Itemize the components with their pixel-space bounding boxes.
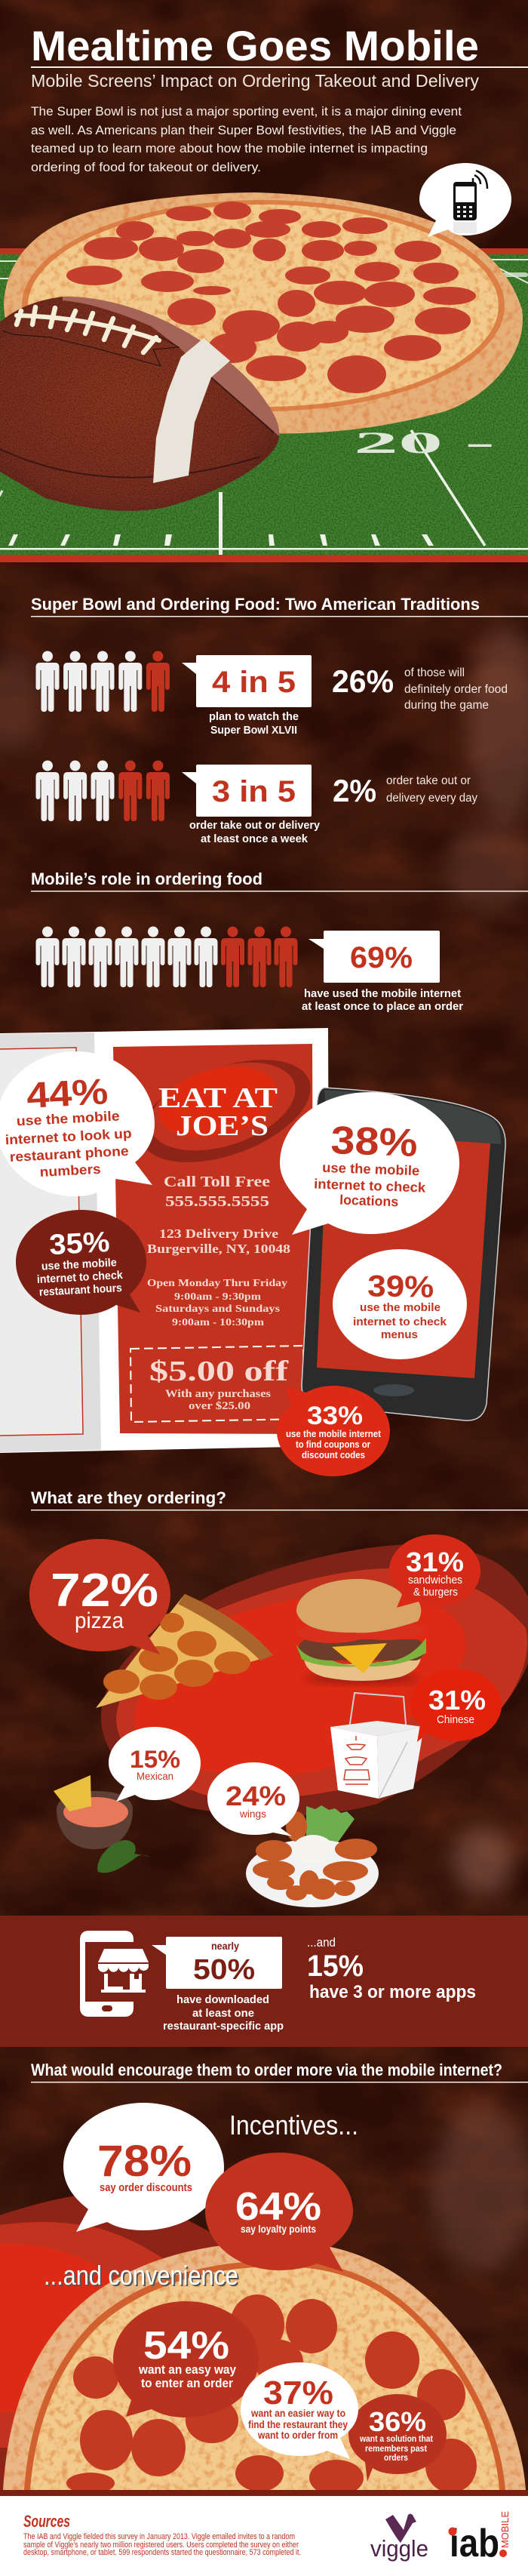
caption: downloaded: at least one	[192, 2007, 254, 2020]
title rule	[31, 66, 528, 68]
bubble: 38%	[280, 1092, 459, 1235]
bubble: 31% Chinese: Chinese	[437, 1713, 474, 1726]
stat: 2%: delivery every day	[386, 792, 477, 805]
bubble: 15% Mexican: 15%	[130, 1746, 180, 1773]
bubble: 33%: discount codes	[302, 1450, 365, 1460]
bubble: 39%: internet to check	[353, 1316, 447, 1328]
bubble: 39%: menus	[381, 1328, 418, 1341]
bubble: 44%: restaurant phone	[9, 1143, 129, 1165]
callout: 3 in 5	[182, 765, 312, 817]
bubble: 37% find restaurant: want to order from	[257, 2430, 338, 2441]
sources text	[23, 2532, 301, 2557]
callout: 3 in 5: 3 in 5	[212, 775, 296, 808]
intro paragraph: The Super Bowl is not just a major sporting event, it is a major dining event	[31, 105, 462, 118]
bubble: 54% easy way: 54%	[143, 2324, 229, 2368]
bubble: 33%: 33%	[307, 1402, 363, 1430]
bubble: 35%: 35%	[48, 1226, 110, 1261]
food: salsa and chip	[54, 1775, 151, 1873]
bubble: 36% remembers orders: orders	[384, 2452, 408, 2463]
people: 69%	[36, 927, 297, 987]
stat: 26%	[332, 663, 508, 712]
callout: 4 in 5: 4 in 5	[212, 666, 296, 699]
bubble: 39%: use the mobile	[360, 1301, 441, 1314]
icon: phone with storefront	[80, 1931, 149, 2017]
caption: order take out: order take out or delivery	[189, 819, 321, 832]
bubble: 78% discounts: 78%	[97, 2137, 192, 2186]
caption: plan to watch	[209, 710, 299, 737]
bubble: 44%: use the mobile	[16, 1108, 120, 1129]
bubble: 44%: numbers	[39, 1162, 101, 1180]
bubble: 37% find restaurant	[241, 2362, 358, 2459]
panel: restaurant apps band	[0, 1916, 528, 2047]
bubble: 31% sandwiches and burgers: 31%	[406, 1547, 464, 1577]
bubble: 44%	[0, 1051, 155, 1196]
intro paragraph: teamed up to learn more about how the mobile internet is impacting	[31, 142, 428, 155]
caption: have used: at least once to place an order	[302, 1000, 463, 1013]
bubble: 15% Mexican	[109, 1727, 201, 1802]
stat: 15% apps: ...and	[307, 1935, 336, 1950]
caption: downloaded: restaurant-specific app	[163, 2020, 284, 2033]
subtitle: Mobile Screens’ Impact on Ordering Takeout and Delivery	[31, 71, 480, 91]
smartphone	[302, 1088, 505, 1420]
bubble: 38%: 38%	[330, 1119, 419, 1165]
bubble: 35%: use the mobile	[41, 1256, 117, 1273]
flyer details: 123 Delivery Drive	[159, 1226, 279, 1241]
flyer details	[147, 1174, 290, 1328]
title: Mealtime Goes Mobile	[31, 22, 479, 69]
flyer details: 9:00am - 10:30pm	[172, 1317, 264, 1328]
logo: viggle	[370, 2514, 428, 2562]
caption: order take out	[189, 819, 321, 845]
red swirl: lower backdrop	[0, 2194, 249, 2490]
coupon	[130, 1346, 305, 1422]
bubble: 54% easy way: to enter an order	[141, 2376, 233, 2390]
bubble: 33%: to find coupons or	[296, 1439, 370, 1450]
bubble: 35%: restaurant hours	[38, 1282, 122, 1299]
footer divider band	[0, 2490, 528, 2496]
hero: football field: 20 -	[354, 426, 495, 460]
logo: iab mobile: MOBILE	[499, 2511, 511, 2548]
bubble: 72% pizza: pizza	[75, 1608, 124, 1633]
stat: 2%	[333, 773, 477, 808]
callout: 50%: 50%	[193, 1954, 255, 1986]
bubble: 37% find restaurant: 37%	[263, 2374, 333, 2411]
caption: order take out: at least once a week	[201, 833, 309, 845]
bubble: 38%: locations	[339, 1193, 399, 1209]
caption: have used	[302, 987, 463, 1013]
bubble: 37% find restaurant: want an easier way to	[250, 2408, 345, 2419]
bubble: 37% find restaurant: find the restaurant they	[248, 2419, 348, 2430]
bubble: 39%: 39%	[367, 1270, 434, 1304]
bubble: 31% sandwiches and burgers: & burgers	[413, 1587, 458, 1599]
callout: mobile phone bubble	[419, 163, 511, 237]
bubble: 78% discounts	[63, 2103, 224, 2232]
intro paragraph: ordering of food for takeout or delivery.	[31, 161, 261, 174]
red swirl backdrop	[101, 1544, 528, 1816]
bubble: 35%: internet to check	[36, 1269, 124, 1286]
bubble: 36% remembers orders	[348, 2394, 447, 2482]
logo: iab mobile: iab	[450, 2522, 499, 2565]
logo: eat at joe's: EAT AT	[158, 1082, 278, 1114]
callout: 69%	[309, 931, 440, 983]
heading: mobile's role: Mobile’s role in ordering food	[31, 869, 262, 888]
hero: football	[0, 294, 283, 517]
bubble: 31% Chinese: 31%	[428, 1685, 486, 1716]
flyer details: Open Monday Thru Friday	[147, 1278, 287, 1289]
callout: 50%: nearly	[211, 1940, 239, 1952]
stat: 15% apps	[307, 1935, 476, 2002]
coupon: With any purchases	[165, 1388, 271, 1400]
flyer details: 9:00am - 9:30pm	[174, 1291, 261, 1303]
sources text: sample of Viggle’s nearly two million registered users. Users completed the survey on either	[23, 2541, 299, 2550]
flyer details: Burgerville, NY, 10048	[147, 1242, 290, 1256]
bubble: 72% pizza: 72%	[51, 1565, 158, 1617]
bubble: 15% Mexican: Mexican	[137, 1770, 173, 1782]
bubble: 36% remembers orders: want a solution that	[359, 2433, 433, 2444]
food: pizza slice	[96, 1594, 273, 1708]
text: and convenience: ...and convenience	[45, 2261, 240, 2292]
bubble: 72% pizza	[29, 1539, 170, 1654]
bubble: 64% loyalty points	[205, 2153, 353, 2272]
text: and convenience: ...and convenience	[44, 2260, 238, 2291]
food: takeout box	[330, 1693, 424, 1799]
coupon: over $25.00	[189, 1400, 250, 1412]
panel: footer	[0, 2496, 528, 2576]
flyer details: 555.555.5555	[165, 1193, 269, 1210]
intro paragraph	[31, 105, 462, 174]
bubble: 39%	[333, 1249, 467, 1359]
large pizza	[0, 2238, 528, 2496]
caption: downloaded	[163, 1993, 284, 2033]
stat: 15% apps: have 3 or more apps	[309, 1982, 476, 2002]
heading: what are they ordering: What are they ordering?	[31, 1488, 226, 1507]
stat: 26%: definitely order food	[404, 683, 508, 696]
bubble: 64% loyalty points: say loyalty points	[241, 2223, 316, 2235]
bubble: 24% wings	[207, 1762, 299, 1836]
bubble: 36% remembers orders: 36%	[369, 2406, 426, 2437]
sources heading: Sources	[23, 2512, 70, 2531]
hero: pizza photo	[0, 189, 528, 438]
bubble: 38%: use the mobile	[322, 1160, 420, 1178]
bubble: 54% easy way	[113, 2301, 259, 2418]
bubble: 31% sandwiches and burgers: sandwiches	[408, 1574, 462, 1587]
stat: 26%: during the game	[404, 699, 489, 712]
icon: pagoda	[344, 1736, 370, 1784]
food: wings plate	[246, 1805, 379, 1907]
bubble: 64% loyalty points: 64%	[235, 2185, 321, 2229]
sources text: desktop, smartphone, or tablet. 599 respondents started the questionnaire, 573 completed it.	[23, 2548, 301, 2557]
callout: 50%	[152, 1937, 282, 1989]
bubble: 35%	[16, 1210, 146, 1315]
stat: 26%: of those will	[404, 666, 465, 679]
bubble: 54% easy way: want an easy way	[138, 2362, 236, 2377]
flyer: paper	[0, 1028, 330, 1453]
bubble: 78% discounts: say order discounts	[100, 2182, 192, 2194]
stat: 26%: 26%	[332, 663, 394, 699]
text: incentives: Incentives...	[229, 2110, 358, 2141]
bubble: 31% Chinese	[410, 1669, 502, 1742]
people: 3 in 5	[36, 761, 170, 821]
bubble: 24% wings: wings	[239, 1808, 266, 1820]
caption: plan to watch: Super Bowl XLVII	[210, 724, 297, 737]
bubble: 31% sandwiches and burgers	[389, 1534, 480, 1608]
bubble: 38%: internet to check	[314, 1176, 427, 1196]
logo: eat at joe's	[127, 1039, 324, 1183]
callout: 4 in 5	[182, 655, 312, 707]
heading: two traditions: Super Bowl and Ordering Food: Two American Traditions	[31, 595, 480, 614]
stat: 2%: order take out or	[386, 774, 471, 787]
stat: 2%: 2%	[333, 773, 376, 808]
callout: 69%: 69%	[350, 941, 413, 974]
bubble: 33%: use the mobile internet	[286, 1429, 382, 1439]
logo: viggle: viggle	[370, 2535, 428, 2562]
bubble: 33%	[277, 1386, 390, 1476]
stat: 15% apps: 15%	[307, 1950, 364, 1983]
bubble: 44%: internet to look up	[5, 1126, 132, 1147]
flyer details: Saturdays and Sundays	[155, 1303, 281, 1315]
people: 4 in 5	[36, 651, 170, 712]
caption: have used: have used the mobile internet	[304, 987, 461, 1000]
coupon: $5.00 off	[149, 1356, 290, 1387]
icon: cell phone	[453, 171, 487, 233]
bubble: 44%: 44%	[26, 1072, 109, 1116]
sources text: The IAB and Viggle fielded this survey in January 2013. Viggle emailed invites to a random	[23, 2532, 295, 2541]
bubble: 24% wings: 24%	[226, 1780, 286, 1811]
flyer details: Call Toll Free	[164, 1174, 270, 1190]
food: burger	[296, 1579, 426, 1684]
intro paragraph: as well. As Americans plan their Super Bowl festivities, the IAB and Viggle	[31, 124, 456, 137]
hero: football field	[0, 248, 528, 562]
caption: plan to watch: plan to watch the	[209, 710, 299, 723]
caption: downloaded: have downloaded	[177, 1993, 269, 2006]
logo: eat at joe's: JOE’S	[176, 1110, 269, 1142]
bubble: 36% remembers orders: remembers past	[365, 2443, 427, 2454]
